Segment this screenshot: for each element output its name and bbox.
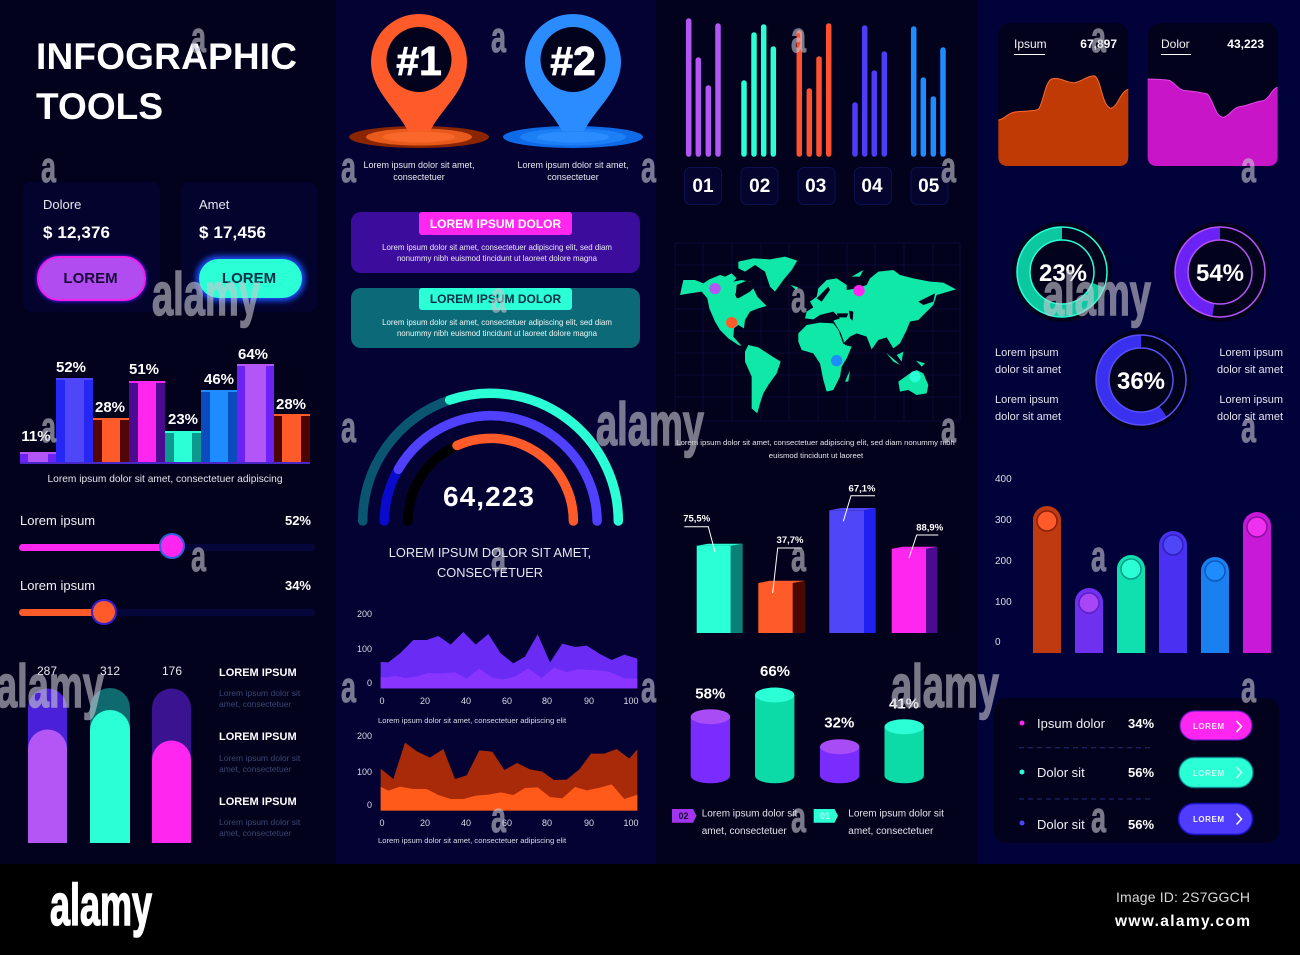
watermark overlay: a	[341, 143, 356, 192]
panel: Dolore card: Dolore	[43, 197, 81, 212]
donut side labels: dolor sit amet	[995, 364, 1061, 376]
area chart: orange: 90	[584, 818, 594, 828]
watermark overlay: a	[191, 532, 206, 581]
bar chart: percentages: 46%	[204, 371, 234, 388]
3D bar chart: 67,1%	[849, 483, 876, 494]
panel: list with buttons: 34%	[1128, 716, 1154, 731]
donut chart: 23%: 23%	[1039, 260, 1087, 287]
legend text list: amet, consectetuer	[219, 699, 291, 709]
world map: Lorem ipsum dolor sit amet, consectetuer adipiscing elit, sed diam nonummy nibh	[676, 438, 955, 447]
watermark overlay: a	[641, 663, 656, 712]
watermark overlay: a	[491, 13, 506, 62]
vertical bar groups 01-05: 04	[861, 176, 883, 197]
area chart: purple	[357, 609, 639, 725]
panel: list with buttons: LOREM	[1193, 815, 1224, 824]
panel: column 4 background	[977, 0, 1300, 864]
watermark overlay: a	[1091, 532, 1106, 581]
panel: column 3 background	[656, 0, 977, 864]
3D bar chart	[683, 483, 944, 633]
lollipop bar chart: 0	[995, 637, 1001, 648]
icon: location pin 2	[503, 14, 643, 182]
panel: Dolore card: $ 12,376	[43, 223, 110, 242]
donut side labels	[995, 347, 1283, 423]
bar chart: percentages: Lorem ipsum dolor sit amet, consectetuer adipiscing	[48, 474, 283, 485]
rounded bar chart	[28, 664, 191, 843]
world map: euismod tincidunt ut laoreet	[769, 451, 864, 460]
panel: Ipsum area card: Ipsum	[1014, 37, 1047, 51]
panel: Dolore card: LOREM	[63, 270, 118, 287]
area chart: purple: 40	[461, 696, 471, 706]
donut side labels: dolor sit amet	[1217, 364, 1283, 376]
watermark overlay: alamy	[891, 653, 999, 720]
donut side labels: Lorem ipsum	[995, 394, 1059, 406]
banner: teal	[351, 288, 640, 348]
legend text list: LOREM IPSUM	[219, 667, 297, 679]
bar chart: percentages: 51%	[129, 361, 159, 378]
watermark overlay: a	[341, 663, 356, 712]
legend: tags: Lorem ipsum dolor sit	[848, 809, 944, 820]
icon: location pin 2: consectetuer	[547, 172, 599, 182]
icon: location pin 1: #1	[396, 38, 442, 84]
watermark overlay: a	[791, 13, 806, 62]
area chart: purple: 100	[623, 696, 639, 706]
watermark overlay: a	[41, 403, 56, 452]
watermark overlay: a	[1241, 403, 1256, 452]
gauge chart: LOREM IPSUM DOLOR SIT AMET,	[389, 545, 591, 560]
title: INFOGRAPHIC	[36, 36, 297, 77]
donut side labels: Lorem ipsum	[995, 347, 1059, 359]
panel: Dolor area card: 43,223	[1227, 37, 1264, 51]
panel: Amet card: Amet	[199, 197, 230, 212]
panel: Dolore card	[23, 182, 160, 312]
panel: list with buttons: Dolor sit	[1037, 817, 1085, 832]
legend: tags	[672, 809, 944, 837]
icon: location pin 1: consectetuer	[393, 172, 445, 182]
lollipop bar chart: 300	[995, 515, 1012, 526]
panel: Amet card: LOREM	[222, 270, 276, 287]
donut chart: 54%	[1170, 222, 1270, 322]
donut chart: 36%: 36%	[1117, 368, 1165, 395]
legend text list: amet, consectetuer	[219, 764, 291, 774]
cylinder chart: 66%	[760, 663, 790, 680]
lollipop bar chart	[995, 474, 1271, 653]
panel: Dolor area card	[1148, 23, 1278, 166]
footer bar: alamy	[50, 873, 152, 938]
area chart: purple: 0	[379, 696, 385, 706]
gauge chart: CONSECTETUER	[437, 565, 543, 580]
legend: tags: amet, consectetuer	[848, 826, 934, 837]
watermark overlay: a	[191, 13, 206, 62]
area chart: orange: 100	[623, 818, 639, 828]
cylinder chart	[691, 663, 924, 783]
area chart: orange: 0	[379, 818, 385, 828]
footer bar	[0, 864, 1300, 955]
bar chart: percentages: 52%	[56, 359, 86, 376]
watermark overlay: alamy	[596, 391, 704, 458]
panel: list with buttons: LOREM	[1193, 769, 1224, 778]
slider: 52%: 52%	[285, 513, 311, 528]
banner: teal: Lorem ipsum dolor sit amet, consectetuer adipiscing elit, sed diam	[382, 318, 612, 327]
watermark overlay: a	[341, 403, 356, 452]
watermark overlay: a	[491, 532, 506, 581]
area chart: purple: 60	[502, 696, 512, 706]
donut side labels: dolor sit amet	[995, 411, 1061, 423]
donut chart: 36%	[1091, 330, 1191, 430]
rounded bar chart: 312	[100, 664, 120, 678]
footer bar: Image ID: 2S7GGCH	[1116, 889, 1250, 905]
watermark overlay: a	[1091, 13, 1106, 62]
area chart: purple: 200	[357, 609, 372, 619]
slider: 34%	[19, 578, 315, 624]
area chart: orange: 100	[357, 767, 372, 777]
legend text list: amet, consectetuer	[219, 828, 291, 838]
panel: Amet card	[181, 182, 317, 312]
vertical bar groups 01-05: 03	[805, 176, 826, 197]
watermark overlay: a	[941, 143, 956, 192]
watermark overlay: a	[1241, 663, 1256, 712]
panel: Ipsum area card: 67,897	[1080, 37, 1117, 51]
title: TOOLS	[36, 86, 163, 127]
area chart: purple: Lorem ipsum dolor sit amet, consectetuer adipiscing elit	[378, 716, 567, 725]
vertical bar groups 01-05: 05	[918, 176, 940, 197]
3D bar chart: 37,7%	[777, 535, 804, 546]
cylinder chart: 58%	[695, 685, 725, 702]
rounded bar chart: 176	[162, 664, 182, 678]
bar chart: percentages: 23%	[168, 411, 198, 428]
icon: location pin 1: Lorem ipsum dolor sit amet,	[363, 160, 475, 170]
lollipop bar chart: 100	[995, 597, 1012, 608]
area chart: orange: 200	[357, 731, 372, 741]
panel: Dolor area card: Dolor	[1161, 37, 1190, 51]
vertical bar groups 01-05	[684, 21, 948, 204]
donut side labels: Lorem ipsum	[1219, 347, 1283, 359]
panel: list with buttons: Ipsum dolor	[1037, 716, 1106, 731]
area chart: purple: 0	[367, 678, 372, 688]
area chart: orange: 20	[420, 818, 430, 828]
cylinder chart: 32%	[824, 715, 854, 732]
banner: teal: LOREM IPSUM DOLOR	[430, 292, 561, 306]
slider: 34%: Lorem ipsum	[20, 578, 95, 593]
watermark overlay: a	[1241, 143, 1256, 192]
panel: list with buttons: 56%	[1128, 765, 1154, 780]
watermark overlay: a	[491, 793, 506, 842]
watermark overlay: a	[41, 143, 56, 192]
icon: location pin 2: Lorem ipsum dolor sit amet,	[517, 160, 629, 170]
donut chart: 54%: 54%	[1196, 260, 1244, 287]
watermark overlay: a	[1091, 793, 1106, 842]
icon: location pin 1	[349, 14, 489, 182]
legend text list: Lorem ipsum dolor sit	[219, 753, 301, 763]
panel: list with buttons: Dolor sit	[1037, 765, 1085, 780]
watermark overlay: alamy	[0, 653, 104, 720]
gauge chart: 64,223	[443, 481, 534, 512]
watermark overlay: a	[791, 532, 806, 581]
panel: column 2 background	[336, 0, 656, 864]
panel: column 1 background	[0, 0, 336, 864]
panel: Amet card: $ 17,456	[199, 223, 266, 242]
watermark overlay: a	[791, 793, 806, 842]
gauge chart	[363, 393, 618, 580]
donut side labels: Lorem ipsum	[1219, 394, 1283, 406]
banner: purple	[351, 212, 640, 273]
area chart: purple: 100	[357, 644, 372, 654]
watermark overlay: alamy	[152, 261, 260, 328]
panel: list with buttons: 56%	[1128, 817, 1154, 832]
vertical bar groups 01-05: 01	[692, 176, 714, 197]
icon: location pin 2: #2	[550, 38, 596, 84]
banner: purple: nonummy nibh euismod tincidunt ut laoreet dolore magna	[397, 254, 598, 263]
legend text list: LOREM IPSUM	[219, 731, 297, 743]
vertical bar groups 01-05: 02	[749, 176, 770, 197]
panel: Ipsum area card	[998, 23, 1128, 166]
3D bar chart: 88,9%	[916, 523, 944, 534]
watermark overlay: alamy	[1043, 261, 1151, 328]
watermark overlay: a	[791, 273, 806, 322]
donut chart: 23%	[1012, 222, 1112, 322]
panel: list with buttons	[994, 698, 1279, 843]
legend: tags: 02	[678, 811, 689, 821]
slider: 52%	[19, 513, 315, 558]
lollipop bar chart: 400	[995, 474, 1012, 485]
title	[36, 36, 297, 127]
area chart: orange: 80	[542, 818, 552, 828]
watermark overlay: a	[641, 143, 656, 192]
legend text list	[219, 667, 301, 838]
bar chart: percentages: 28%	[95, 399, 125, 416]
area chart: orange	[357, 731, 639, 845]
banner: teal: nonummy nibh euismod tincidunt ut laoreet dolore magna	[397, 329, 598, 338]
area chart: orange: Lorem ipsum dolor sit amet, consectetuer adipiscing elit	[378, 836, 567, 845]
legend: tags: amet, consectetuer	[702, 826, 787, 837]
3D bar chart: 75,5%	[683, 514, 711, 525]
area chart: orange: 0	[367, 800, 372, 810]
bar chart: percentages: 11%	[21, 428, 51, 445]
legend text list: Lorem ipsum dolor sit	[219, 688, 301, 698]
lollipop bar chart: 200	[995, 556, 1012, 567]
area chart: orange: 40	[461, 818, 471, 828]
banner: purple: LOREM IPSUM DOLOR	[430, 217, 561, 231]
area chart: purple: 80	[542, 696, 552, 706]
slider: 34%: 34%	[285, 578, 311, 593]
cylinder chart: 41%	[889, 695, 919, 712]
legend text list: Lorem ipsum dolor sit	[219, 817, 301, 827]
world map	[674, 243, 960, 460]
banner: purple: Lorem ipsum dolor sit amet, consectetuer adipiscing elit, sed diam	[382, 243, 612, 252]
slider: 52%: Lorem ipsum	[20, 513, 95, 528]
area chart: purple: 90	[584, 696, 594, 706]
rounded bar chart: 287	[37, 664, 57, 678]
area chart: orange: 60	[502, 818, 512, 828]
legend: tags: 01	[820, 811, 830, 821]
donut side labels: dolor sit amet	[1217, 411, 1283, 423]
watermark overlay: a	[491, 273, 506, 322]
panel: list with buttons: LOREM	[1193, 722, 1224, 731]
watermark overlay: a	[941, 403, 956, 452]
footer bar: www.alamy.com	[1114, 913, 1250, 930]
bar chart: percentages	[20, 346, 310, 485]
legend text list: LOREM IPSUM	[219, 796, 297, 808]
area chart: purple: 20	[420, 696, 430, 706]
legend: tags: Lorem ipsum dolor sit	[702, 809, 798, 820]
bar chart: percentages: 64%	[238, 346, 268, 363]
bar chart: percentages: 28%	[276, 396, 306, 413]
